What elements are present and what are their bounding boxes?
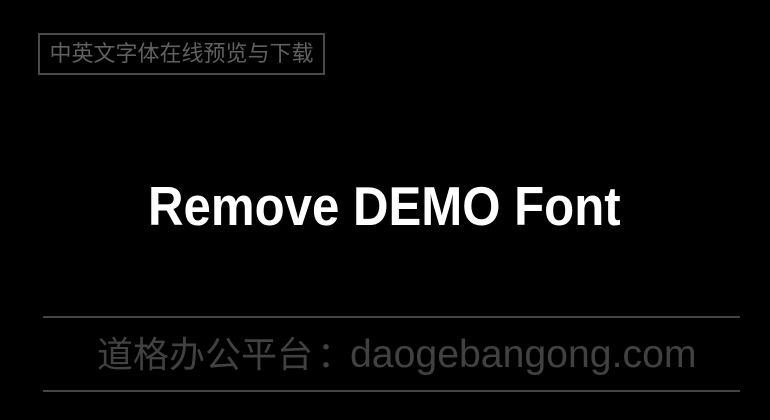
- footer text: platform and website: daogebangong.com: [350, 333, 697, 376]
- divider: lower rule: [43, 390, 740, 392]
- footer text: platform and website: [97, 333, 697, 376]
- badge: font preview and download: 中英文字体在线预览与下载: [49, 41, 314, 66]
- footer text: platform and website: 道格办公平台：: [97, 334, 353, 375]
- divider: upper rule: [43, 316, 740, 318]
- title: Remove DEMO Font: [148, 175, 621, 237]
- badge: font preview and download: [38, 33, 325, 75]
